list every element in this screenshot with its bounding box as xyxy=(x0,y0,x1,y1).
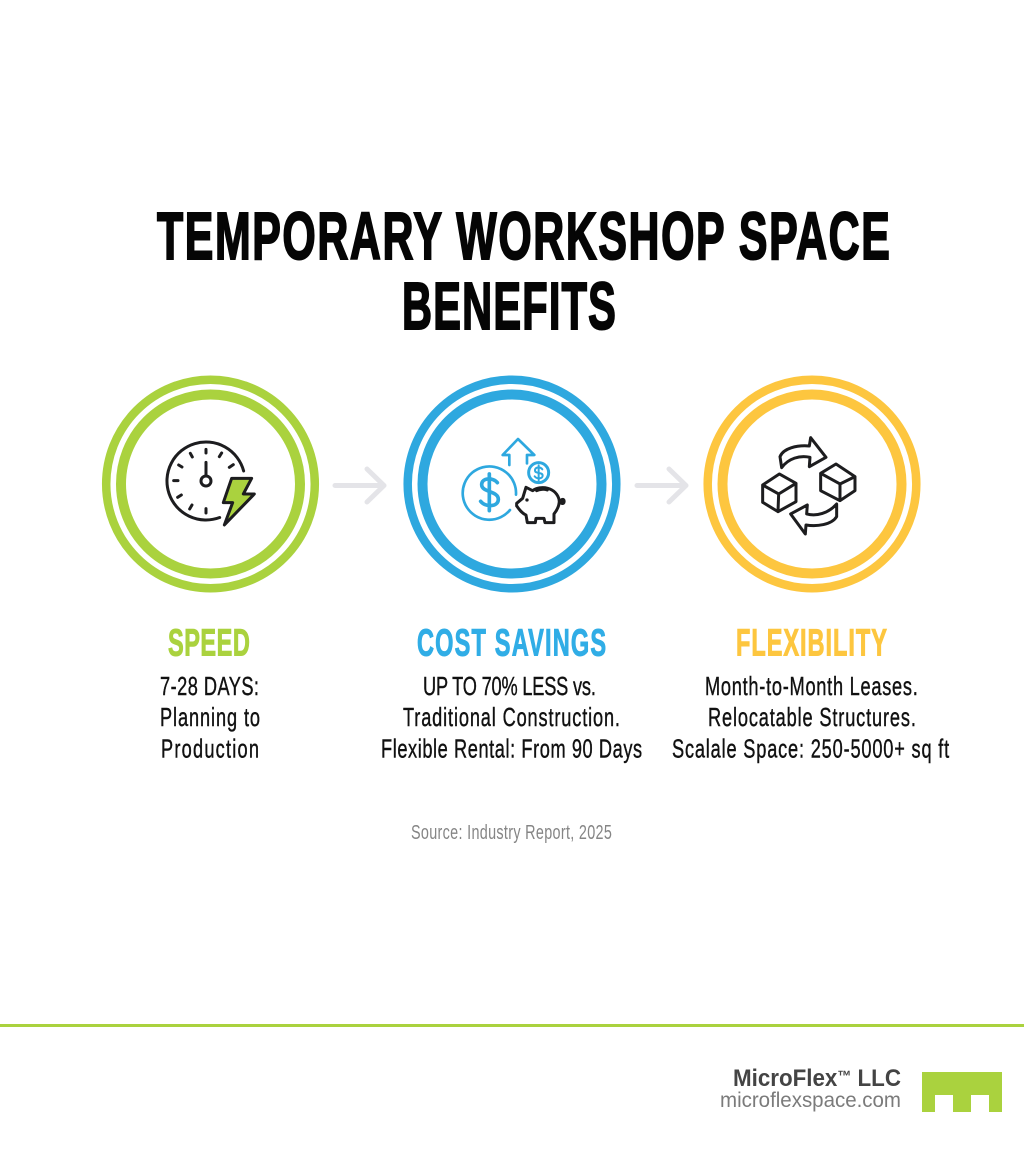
text block: speed details: 7-28 DAYS: xyxy=(160,672,259,701)
footer rule xyxy=(0,1024,1024,1027)
text block: flexibility details: Relocatable Structures. xyxy=(708,703,916,732)
panel: flexibility ring xyxy=(708,380,916,588)
icon: dollar coins, up arrow and piggy bank xyxy=(463,439,564,523)
text block: flexibility details xyxy=(672,672,950,763)
text block: speed details: Production xyxy=(161,734,259,763)
arrow: cost savings to flexibility xyxy=(637,469,686,502)
text block: speed details: Planning to xyxy=(160,703,260,732)
source note: Source: Industry Report, 2025 xyxy=(411,821,612,844)
heading: cost savings: COST SAVINGS xyxy=(417,621,606,664)
text block: cost savings details xyxy=(381,672,642,763)
title: BENEFITS xyxy=(402,269,616,343)
text block: flexibility details: Month-to-Month Leases. xyxy=(705,672,918,701)
icon: speedometer with lightning bolt xyxy=(167,442,254,525)
icon: cubes with circular arrows xyxy=(763,438,855,534)
text block: speed details xyxy=(160,672,260,763)
text block: flexibility details: Scalale Space: 250-5000+ sq ft xyxy=(672,734,950,763)
footer brand text xyxy=(720,1065,901,1112)
footer brand text: MicroFlex xyxy=(733,1065,845,1092)
footer brand text: ™ xyxy=(837,1068,851,1085)
footer brand text: microflexspace.com xyxy=(720,1089,901,1112)
panel: cost savings ring xyxy=(408,380,616,588)
heading: speed: SPEED xyxy=(168,621,250,664)
heading: flexibility: FLEXIBILITY xyxy=(736,621,887,664)
text block: cost savings details: Flexible Rental: From 90 Days xyxy=(381,734,642,763)
arrow: speed to cost savings xyxy=(335,469,384,502)
footer brand text: LLC xyxy=(851,1065,901,1092)
icon: MicroFlex logo xyxy=(922,1072,1002,1112)
panel: speed ring xyxy=(106,380,315,588)
title xyxy=(157,198,890,343)
title: TEMPORARY WORKSHOP SPACE xyxy=(157,198,890,273)
text block: cost savings details: Traditional Construction. xyxy=(403,703,620,732)
text block: cost savings details: UP TO 70% LESS vs. xyxy=(423,672,596,701)
